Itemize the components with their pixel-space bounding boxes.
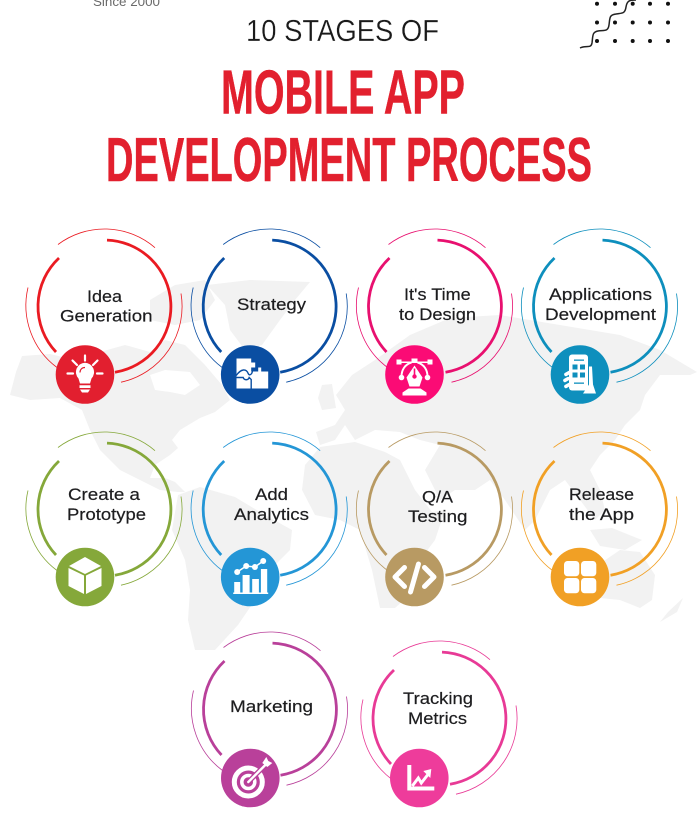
panel: create a prototype xyxy=(26,432,182,606)
heading: mobile app: MOBILE APP xyxy=(221,58,465,128)
label: create a prototype xyxy=(67,485,146,524)
icon: analytics chart xyxy=(221,548,280,606)
label: tracking metrics: Metrics xyxy=(408,709,467,728)
icon: app grid xyxy=(551,548,609,606)
icon: puzzle pieces xyxy=(221,345,280,404)
label: release the app: the App xyxy=(569,505,634,524)
label: it's time to design: It's Time xyxy=(404,285,471,304)
icon: phone in hand xyxy=(551,345,609,404)
icon: light bulb xyxy=(56,345,114,404)
label: q/a testing: Testing xyxy=(408,507,468,526)
panel: tracking metrics xyxy=(361,641,517,807)
label: release the app: Release xyxy=(569,485,634,504)
panel: q/a testing xyxy=(356,432,513,606)
label: add analytics: Analytics xyxy=(234,505,309,524)
label: strategy: Strategy xyxy=(237,295,307,314)
label: idea generation: Idea xyxy=(87,287,123,306)
label: idea generation xyxy=(60,287,152,326)
label: applications development: Development xyxy=(545,305,656,324)
panel: add analytics xyxy=(191,432,347,606)
decorative dots and wave xyxy=(580,0,670,48)
icon: cube xyxy=(56,548,114,606)
label: it's time to design: to Design xyxy=(399,305,476,324)
icon: code brackets xyxy=(385,548,444,606)
label: it's time to design xyxy=(399,285,476,324)
panel: marketing xyxy=(191,632,348,807)
panel: applications development xyxy=(521,229,678,404)
panel: idea generation xyxy=(26,229,182,404)
label: create a prototype: Create a xyxy=(68,485,141,504)
label: marketing: Marketing xyxy=(230,697,313,716)
label: applications development xyxy=(545,285,656,324)
heading: 10 stages of: 10 STAGES OF xyxy=(246,13,439,48)
label: applications development: Applications xyxy=(549,285,652,304)
label: tracking metrics xyxy=(403,689,473,728)
label: q/a testing: Q/A xyxy=(422,488,454,507)
label: release the app xyxy=(569,485,634,524)
icon: pen tool xyxy=(385,345,444,404)
label: add analytics: Add xyxy=(255,485,288,504)
label: add analytics xyxy=(234,485,309,524)
label: create a prototype: Prototype xyxy=(67,505,146,524)
icon: trend chart xyxy=(390,749,449,807)
panel: it's time to design xyxy=(356,229,513,404)
label: q/a testing xyxy=(408,488,468,526)
label: idea generation: Generation xyxy=(60,307,152,326)
panel: release the app xyxy=(521,432,678,606)
panel: strategy xyxy=(191,229,347,404)
label: tracking metrics: Tracking xyxy=(403,689,473,708)
background world map xyxy=(10,280,697,650)
icon: target with arrow xyxy=(221,749,280,807)
